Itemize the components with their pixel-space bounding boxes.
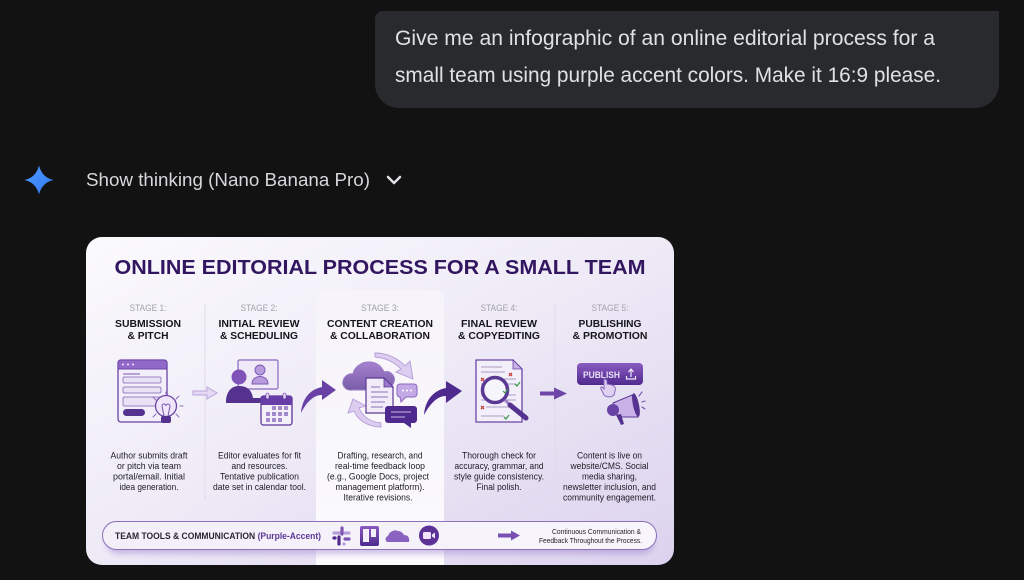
continuous communication note: Feedback Throughout the Process. [539, 536, 642, 545]
icon: chat tool [334, 528, 349, 544]
stage 2 description [213, 450, 306, 492]
stage 1 description [110, 450, 188, 492]
stage 5 heading: PUBLISHING [578, 319, 642, 330]
stage 4 description: style guide consistency. [454, 472, 544, 482]
icon: chevron [388, 177, 400, 183]
panel: stage 2 [213, 303, 306, 492]
stage 4 description: accuracy, grammar, and [454, 461, 544, 471]
stage 2 description: date set in calendar tool. [213, 482, 306, 492]
title: ONLINE EDITORIAL PROCESS FOR A SMALL TEAM [114, 257, 646, 279]
stage 2 heading: INITIAL REVIEW [218, 319, 300, 330]
panel: stage 3 [327, 303, 433, 502]
stage 5 description: media sharing, [582, 472, 637, 482]
panel: stage 4 [454, 303, 544, 492]
icon: form with light bulb [118, 360, 183, 423]
icon: publish button and megaphone: PUBLISH [583, 370, 620, 380]
stage 1 description: or pitch via team [117, 461, 181, 471]
stage 5 description [563, 450, 656, 502]
icon: board tool [360, 526, 379, 546]
stage 5 description: newsletter inclusion, and [563, 482, 656, 492]
icon: cloud tool [386, 530, 409, 542]
stage 5 heading [572, 303, 648, 342]
icon: reviewer and calendar [226, 360, 292, 425]
stage 2 heading: STAGE 2: [240, 303, 278, 313]
stage 2 description: Tentative publication [220, 472, 299, 482]
continuous communication note [539, 527, 642, 545]
continuous communication note: Continuous Communication & [552, 527, 641, 536]
icon: video tool [419, 526, 439, 546]
arrow: stage 4 to 5 [540, 388, 567, 400]
stage 5 description: community engagement. [563, 492, 656, 502]
stage 4 heading [458, 303, 540, 342]
infographic card [86, 237, 674, 565]
stage 4 heading: STAGE 4: [480, 303, 518, 313]
stage 1 heading: & PITCH [128, 331, 168, 342]
stage 1 description: idea generation. [120, 482, 178, 492]
stage 1 heading: SUBMISSION [115, 319, 181, 330]
icon: document and magnifier [476, 360, 526, 422]
stage 3 description: Iterative revisions. [344, 492, 412, 502]
stage 3 heading: CONTENT CREATION [327, 319, 433, 330]
prompt text: Give me an infographic of an online editorial process for a [395, 27, 935, 50]
stage 1 heading: STAGE 1: [130, 303, 166, 313]
prompt text [395, 27, 941, 87]
stage 3 heading: & COLLABORATION [330, 331, 430, 342]
icon: publish button and megaphone [577, 363, 645, 425]
stage 2 heading: & SCHEDULING [220, 331, 298, 342]
stage 3 description: Drafting, research, and [338, 450, 422, 460]
team tools label: TEAM TOOLS & COMMUNICATION (Purple-Accent) [115, 531, 321, 541]
stage 4 description [454, 450, 544, 492]
stage 1 description: Author submits draft [110, 450, 188, 460]
show thinking label: Show thinking (Nano Banana Pro) [86, 170, 370, 190]
stage 2 heading [218, 303, 300, 342]
stage 5 heading: STAGE 5: [592, 303, 628, 313]
stage 3 heading: STAGE 3: [361, 303, 399, 313]
arrow: stage 3 to 4 [424, 381, 462, 415]
prompt text: small team using purple accent colors. Make it 16:9 please. [395, 64, 941, 87]
arrow: stage 1 to 2 [193, 387, 217, 399]
stage 4 heading: FINAL REVIEW [461, 319, 538, 330]
arrow: continuous feedback [498, 530, 520, 540]
panel: stage 1 [110, 303, 188, 492]
prompt bubble [375, 11, 999, 108]
stage 4 heading: & COPYEDITING [458, 331, 540, 342]
stage 3 description [327, 450, 429, 502]
stage 4 description: Final polish. [476, 482, 522, 492]
stage 3 description: real-time feedback loop [335, 461, 425, 471]
stage 1 description: portal/email. Initial [113, 472, 185, 482]
stage 5 heading: & PROMOTION [572, 331, 648, 342]
stage 2 description: Editor evaluates for fit [218, 450, 301, 460]
stage 2 description: and resources. [232, 461, 288, 471]
stage 4 description: Thorough check for [462, 450, 536, 460]
arrow: stage 2 to 3 [301, 380, 336, 413]
stage 3 description: (e.g., Google Docs, project [327, 472, 429, 482]
stage 3 heading [327, 303, 433, 342]
team tools bar [102, 522, 656, 550]
panel: stage 5 [563, 303, 656, 502]
stage 3 description: management platform). [336, 482, 424, 492]
stage 1 heading [115, 303, 181, 342]
stage 5 description: website/CMS. Social [570, 461, 648, 471]
icon: blue sparkle [24, 166, 54, 194]
panel: stage 3 highlight [316, 290, 444, 565]
stage 5 description: Content is live on [577, 450, 642, 460]
icon: cloud, document and chat [343, 353, 417, 428]
